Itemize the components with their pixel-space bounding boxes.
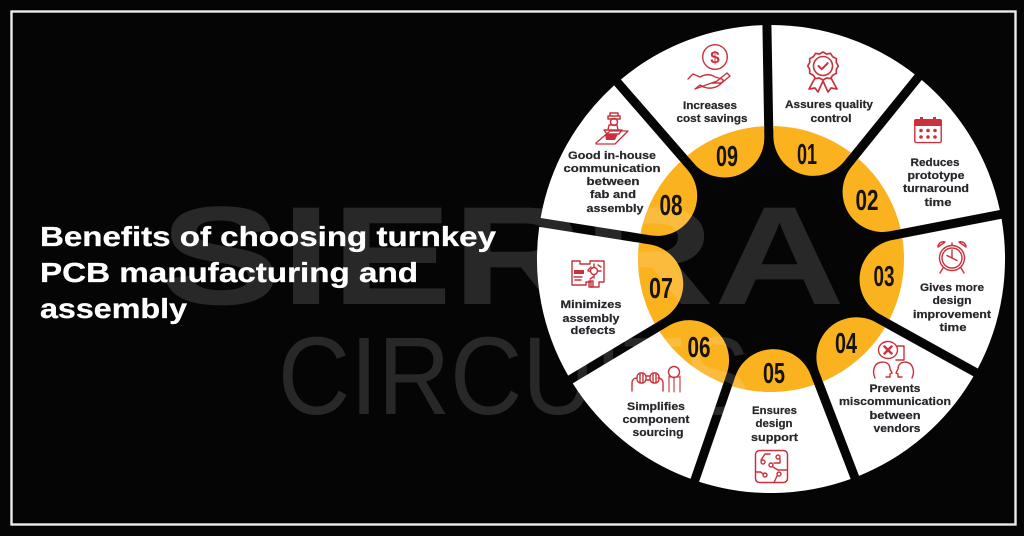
segment 04: prevents miscommunication between vendors: vendors xyxy=(874,423,920,435)
segment 04: prevents miscommunication between vendors: 04 xyxy=(835,328,857,360)
segment 08: good in-house communication: Good in-house xyxy=(568,150,656,162)
segment 06: simplifies component sourcing: Simplifies xyxy=(627,401,685,413)
segment 03: gives more design improvement time: Gives more xyxy=(920,282,984,294)
segment 07: minimizes assembly defects: defects xyxy=(570,325,616,337)
segment 08: good in-house communication: assembly xyxy=(586,203,644,215)
segment 02: reduces prototype turnaround time: turnaround xyxy=(903,183,969,195)
segment 09: increases cost savings xyxy=(676,45,748,173)
title xyxy=(40,221,496,324)
segment 08: good in-house communication xyxy=(564,113,682,222)
segment 09: increases cost savings: cost savings xyxy=(676,113,748,125)
segment 08: good in-house communication: fab and xyxy=(590,189,636,201)
icon: circuit board xyxy=(572,261,604,287)
watermark logo: SIERRA xyxy=(160,177,845,334)
segment 08: good in-house communication: communication xyxy=(564,163,661,175)
segment 05: ensures design support: 05 xyxy=(763,358,785,390)
segment 01: assures quality control: control xyxy=(810,113,852,125)
segment 05: ensures design support: support xyxy=(751,432,798,444)
segment 02: reduces prototype turnaround time: Reduces xyxy=(910,157,960,169)
segment 06: simplifies component sourcing: component xyxy=(622,414,690,426)
title: Benefits of choosing turnkey xyxy=(40,221,496,252)
segment 03: gives more design improvement time: improvement xyxy=(913,309,991,321)
segment 05: ensures design support xyxy=(751,358,798,482)
segment 02: reduces prototype turnaround time: prototype xyxy=(908,170,964,182)
segment 06: simplifies component sourcing: 06 xyxy=(688,332,710,364)
watermark logo: CIRCUITS xyxy=(278,315,750,438)
segment 08: good in-house communication: 08 xyxy=(660,190,682,222)
segment 03: gives more design improvement time: design xyxy=(932,295,972,307)
segment 06: simplifies component sourcing: sourcing xyxy=(632,427,684,439)
segment 04: prevents miscommunication between vendors: Prevents xyxy=(870,383,920,395)
segment 04: prevents miscommunication between vendors xyxy=(835,328,951,435)
segment 02: reduces prototype turnaround time: time xyxy=(924,197,952,209)
segment 02: reduces prototype turnaround time: 02 xyxy=(856,185,878,217)
title: assembly xyxy=(40,293,187,324)
icon: two heads with crossed speech bubble xyxy=(874,342,914,378)
segment 06: simplifies component sourcing xyxy=(622,332,710,439)
segment 07: minimizes assembly defects: assembly xyxy=(562,313,620,325)
title: PCB manufacturing and xyxy=(40,257,418,288)
segment 07: minimizes assembly defects: 07 xyxy=(649,273,673,305)
segment 07: minimizes assembly defects xyxy=(560,261,673,337)
segment 05: ensures design support: design xyxy=(756,418,793,430)
segment 04: prevents miscommunication between vendors: miscommunication xyxy=(839,396,951,408)
segment 01: assures quality control: Assures quality xyxy=(785,99,874,111)
icon: circuit chip xyxy=(756,450,788,482)
wheel of nine white and yellow segments xyxy=(527,13,1014,494)
icon: assembly machine xyxy=(596,113,628,144)
watermark logo xyxy=(160,177,845,438)
icon: calendar xyxy=(914,117,942,143)
icon: hand holding dollar coin: $ xyxy=(710,48,720,67)
icon: alarm clock xyxy=(938,242,966,273)
icon: rosette badge xyxy=(808,52,838,92)
segment 03: gives more design improvement time xyxy=(874,242,991,334)
segment 09: increases cost savings: 09 xyxy=(716,141,738,173)
segment 05: ensures design support: Ensures xyxy=(752,405,797,417)
segment 07: minimizes assembly defects: Minimizes xyxy=(560,299,622,311)
segment 09: increases cost savings: Increases xyxy=(683,100,737,112)
segment 04: prevents miscommunication between vendors: between xyxy=(870,410,921,422)
icon: resistor and capacitor xyxy=(632,366,680,392)
segment 01: assures quality control: 01 xyxy=(797,139,817,171)
segment 03: gives more design improvement time: 03 xyxy=(874,261,894,293)
segment 03: gives more design improvement time: time xyxy=(940,322,966,334)
segment 01: assures quality control xyxy=(785,52,874,171)
segment 02: reduces prototype turnaround time xyxy=(856,117,969,217)
segment 08: good in-house communication: between xyxy=(586,176,640,188)
